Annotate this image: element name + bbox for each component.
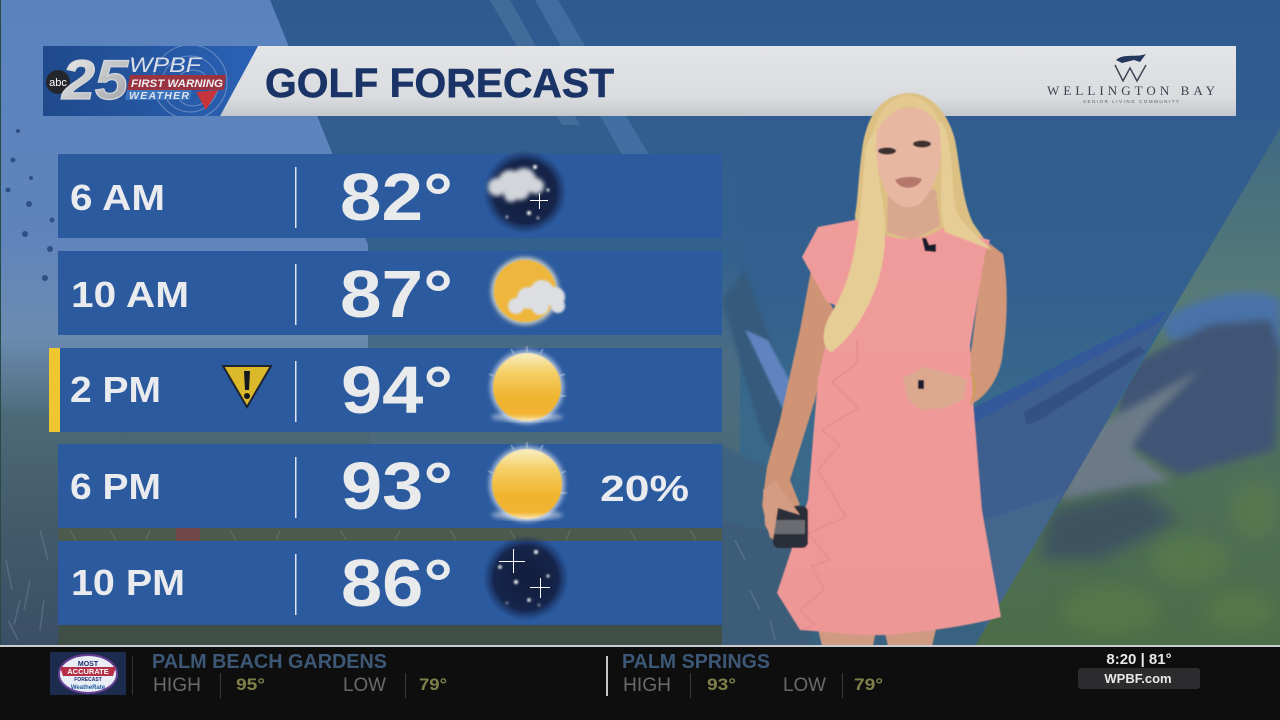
eyes [878,140,931,154]
row: 2 PM (alert) [49,346,722,432]
hair part highlight [872,95,944,140]
city forecast: Palm Beach Gardens: PALM BEACH GARDENS [152,651,387,673]
icon: partly cloudy sun [491,257,565,325]
icon: clear night [483,535,569,621]
lower right grass triangle with blurred club [960,128,1280,646]
forecast table [49,150,722,625]
icon: cloudy night [483,150,567,234]
row: 10 AM: 87° [340,257,453,332]
ticker badge: most accurate forecast: FORECAST [74,677,102,683]
city forecast: Palm Springs: 93° [707,675,736,694]
icon: sun [489,346,566,424]
grass strips between rows [58,528,722,541]
row: 10 PM [58,535,722,625]
row: 6 PM: 6 PM [70,466,161,507]
abc badge: abc [49,77,67,89]
title: GOLF FORECAST [265,60,614,106]
row: 6 AM: 6 AM [70,177,165,218]
row: 6 AM: 82° [340,160,453,235]
sponsor logo: Wellington Bay: SENIOR LIVING COMMUNITY [1083,99,1179,104]
header banner [43,45,1236,119]
light blue golf shape at left [0,0,368,420]
hair front [824,122,992,352]
right arm [925,240,1007,410]
rain chance: 20% [600,468,689,509]
station website pill [1078,668,1200,689]
logo radar rings [153,45,227,119]
microphone [922,238,936,252]
ticker badge: most accurate forecast: WeatheRate [71,685,106,691]
city forecast: Palm Beach Gardens: 79° [419,675,447,694]
golf club head behind presenter [965,313,1167,520]
channel number: 25 [61,48,129,111]
lower left field [1,472,58,645]
dress [777,220,1001,635]
city forecast: Palm Beach Gardens: HIGH [153,675,201,696]
left grass texture [6,530,775,640]
left arm [762,270,834,540]
abc badge [46,70,70,94]
remote in hand [763,480,808,548]
icon: heat warning triangle [223,366,271,407]
row: 2 PM (alert): 2 PM [70,369,161,410]
row: 10 PM: 86° [341,546,453,621]
logo red pointer [196,90,218,110]
row: 6 PM: 93° [341,449,453,524]
sponsor logo: Wellington Bay: WELLINGTON BAY [1047,83,1216,98]
dress ruffle [800,340,858,630]
row: 10 PM: 10 PM [71,562,185,603]
WPBF wordmark: WPBF [129,54,202,77]
ticker badge: most accurate forecast [50,652,126,695]
bottom ticker [0,645,1280,720]
hair back [855,93,990,300]
right hand with ring [903,367,967,410]
sponsor logo: Wellington Bay [1047,54,1216,104]
ticker badge: most accurate forecast: ACCURATE [67,667,109,676]
yellow alert bar [49,348,61,432]
city forecast: Palm Springs [622,651,883,698]
city forecast: Palm Beach Gardens [152,651,447,698]
city forecast: Palm Springs: PALM SPRINGS [622,651,770,673]
city forecast: Palm Springs: HIGH [623,675,671,696]
row: 2 PM (alert): 94° [341,353,453,428]
presenter in pink dress [762,93,1007,646]
city forecast: Palm Beach Gardens: 95° [236,675,265,694]
banner white strip [220,46,1236,116]
icon: sun [488,442,567,522]
city forecast: Palm Springs: 79° [854,675,883,694]
shaft stripes [490,0,580,125]
weather label: WEATHER [129,90,189,102]
clock and current temperature: 8:20 | 81° [1106,651,1172,668]
ticker badge: most accurate forecast: MOST [78,661,99,668]
golf ball dimples [6,129,54,281]
row: 6 AM [58,150,722,238]
station logo [43,45,258,119]
city forecast: Palm Springs: LOW [783,675,826,696]
mouth [895,177,922,188]
bracelet [970,372,974,404]
row: 6 PM [58,442,722,528]
row: 10 AM: 10 AM [71,274,189,315]
row: 10 AM [58,251,722,335]
station website pill: WPBF.com [1104,671,1172,686]
first warning strip: FIRST WARNING [131,78,223,90]
face [875,108,942,207]
city forecast: Palm Beach Gardens: LOW [343,675,386,696]
neck [887,190,940,240]
legs [817,625,937,646]
